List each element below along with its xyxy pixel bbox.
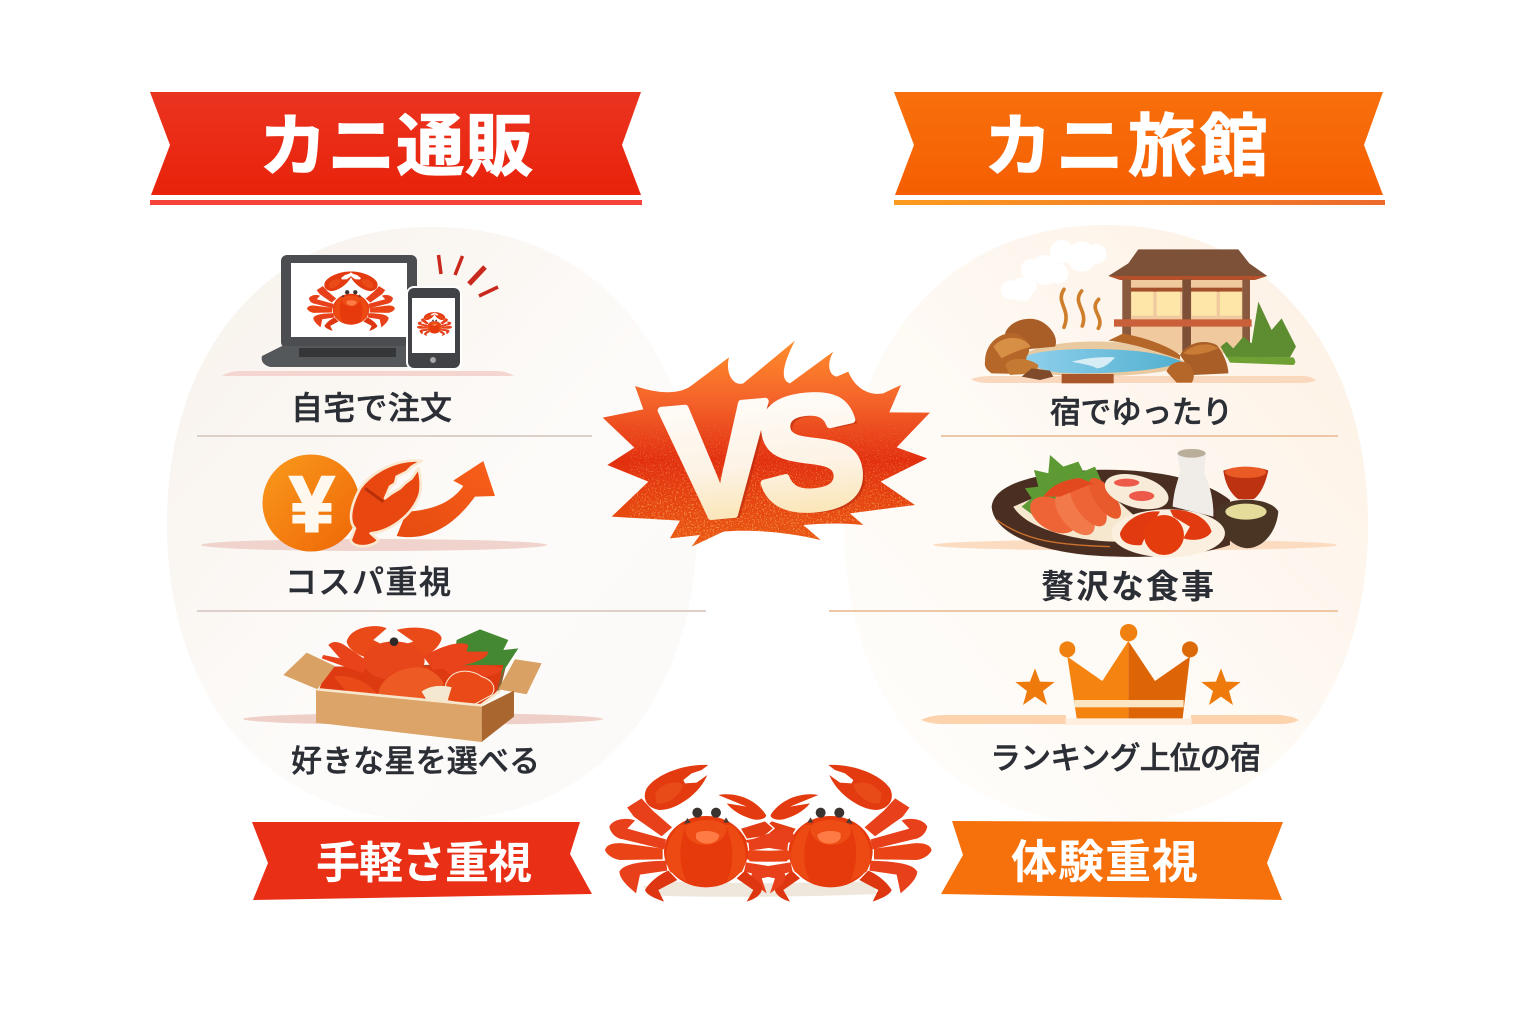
sub-banner: 手軽さ重視: 手軽さ重視: [316, 839, 532, 888]
item: コスパ重視: [201, 454, 547, 600]
ground shadow: [222, 371, 514, 376]
sub-banner: 手軽さ重視: [252, 822, 592, 900]
left crab: [605, 765, 794, 902]
item: 好きな星を選べる: [243, 626, 603, 779]
ground shadow: [201, 539, 547, 551]
building: [1122, 279, 1250, 353]
icon: laptop: [262, 255, 417, 367]
item: 宿でゆったり: [971, 240, 1316, 430]
item: 贅沢な食事: [933, 449, 1337, 605]
sub-banner: 体験重視: 体験重視: [1011, 836, 1198, 888]
heading banner: カニ旅館: カニ旅館: [984, 109, 1268, 185]
divider: [829, 610, 1338, 612]
heading banner: カニ旅館: [894, 92, 1385, 205]
sake bottle: [1173, 449, 1213, 517]
ground shadow: [243, 713, 603, 725]
right crab: [743, 765, 932, 902]
panel: left blob background: [167, 227, 697, 821]
icon: crab box: [283, 626, 542, 742]
crab plate: [1112, 509, 1225, 557]
label: 宿でゆったり: [1050, 395, 1233, 430]
icon: yen coin: [262, 454, 360, 552]
divider: [197, 435, 592, 437]
garnish: [1022, 455, 1102, 517]
clouds: [1001, 240, 1107, 301]
heading banner: カニ通販: [150, 92, 642, 205]
VS burst: [603, 341, 930, 558]
sake cup: [1223, 467, 1268, 499]
sashimi: [1024, 473, 1127, 542]
icon: crab claw: [351, 461, 422, 546]
plate: [992, 470, 1230, 557]
VS lettering: VS: [657, 359, 866, 554]
explosion shape: [603, 341, 930, 547]
trees: [1221, 302, 1296, 357]
panel: right blob background: [844, 225, 1368, 823]
icon: yen coin: ¥: [290, 460, 334, 548]
label: 贅沢な食事: [1041, 568, 1214, 605]
icon: gourmet meal: [992, 449, 1278, 557]
ground shadow: [933, 540, 1337, 550]
label: 好きな星を選べる: [291, 744, 540, 779]
ground shadow: [921, 715, 1299, 724]
heading banner: カニ通販: カニ通販: [259, 109, 533, 185]
icon: crown and stars: [1015, 624, 1241, 725]
sauce bowl: [1215, 500, 1278, 548]
rocks: [1005, 319, 1056, 350]
label: コスパ重視: [285, 564, 451, 600]
label: 自宅で注文: [291, 390, 452, 426]
ground shadow: [971, 376, 1316, 383]
hot spring pool: [1015, 341, 1187, 376]
label: ランキング上位の宿: [990, 741, 1261, 776]
divider: [941, 435, 1338, 437]
divider: [197, 610, 706, 612]
icon: two crabs: [605, 765, 932, 902]
item: ランキング上位の宿: [921, 624, 1299, 776]
icon: smartphone: [406, 286, 462, 370]
item: 自宅で注文: [222, 255, 514, 426]
ground shadow: [642, 882, 877, 897]
icon: notification rays: [438, 255, 498, 296]
sub-banner: 体験重視: [941, 821, 1283, 900]
icon: rising arrow: [397, 461, 495, 537]
icon: ryokan and hot spring: [985, 240, 1296, 383]
VS lettering: VS: [662, 362, 871, 558]
steam: [1061, 289, 1100, 328]
side plate: [1101, 468, 1172, 516]
